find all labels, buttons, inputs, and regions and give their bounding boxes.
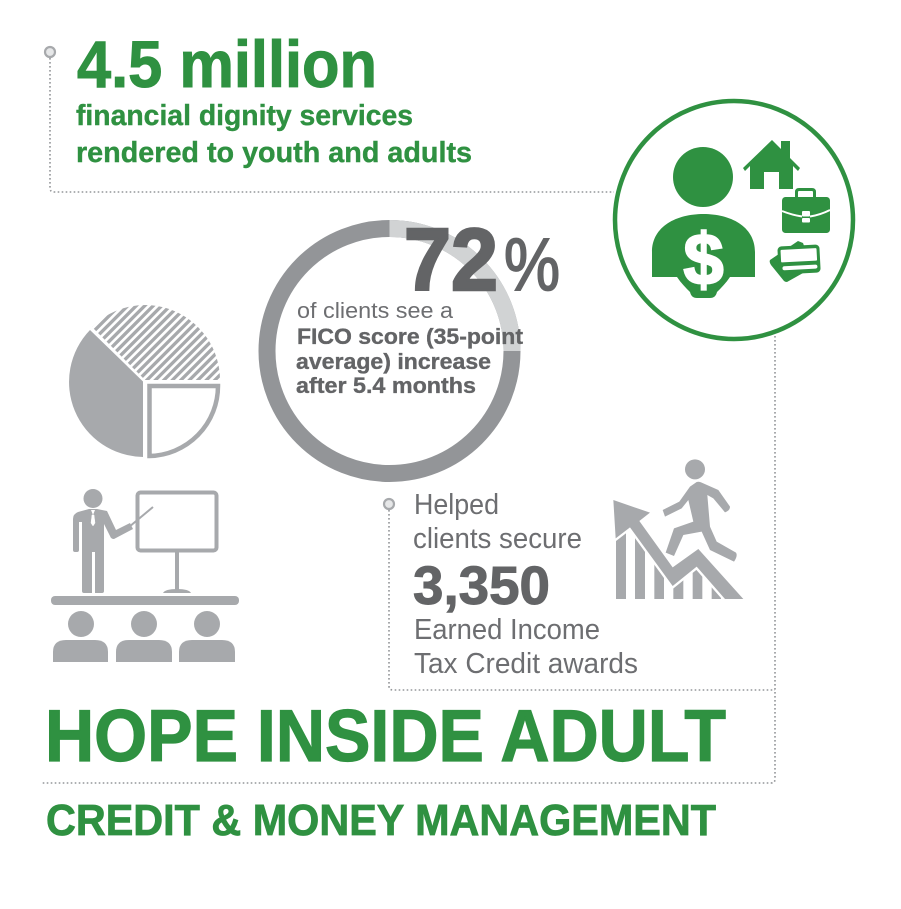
text block: Earned Income Tax Credit: Helped <box>414 489 499 521</box>
text block: Earned Income Tax Credit: clients secure <box>413 523 582 555</box>
stat: 72%: % <box>504 223 560 306</box>
icon: audience <box>53 611 235 662</box>
icon: house <box>743 140 800 189</box>
subheading: financial dignity services: financial dignity services <box>76 100 413 132</box>
headline: 4.5 million: 4.5 million <box>77 27 377 101</box>
stage <box>51 596 239 605</box>
stat: 72% <box>404 210 560 309</box>
icon: presenter at whiteboard with audience <box>51 489 239 662</box>
connector: right dotted line <box>41 336 775 783</box>
icon: pie chart <box>69 305 220 458</box>
icon: person with dollar: $ <box>683 220 724 300</box>
text block: FICO score description: FICO score (35-point <box>297 324 524 349</box>
text block: FICO score description <box>296 298 524 398</box>
subtitle: Credit and Money Management: CREDIT & MONEY MANAGEMENT <box>46 796 716 845</box>
text block: Earned Income Tax Credit: Earned Income <box>414 614 600 646</box>
icon: person climbing rising arrow <box>613 459 747 603</box>
connector: top dotted line <box>45 47 614 192</box>
icon: whiteboard <box>138 492 216 593</box>
chart: 72 percent donut ring <box>267 228 512 474</box>
icon: credit cards <box>770 241 821 282</box>
subheading: financial dignity services: rendered to youth and adults <box>76 137 472 169</box>
bars <box>616 527 721 599</box>
stat: 3,350: 3,350 <box>413 556 550 616</box>
text block: FICO score description: average) increase <box>296 349 491 374</box>
icon: person with dollar <box>652 147 755 300</box>
text block: Earned Income Tax Credit: Tax Credit awards <box>414 648 638 680</box>
icon: financial services badge <box>615 101 853 339</box>
icon: briefcase <box>782 190 830 233</box>
runner <box>663 459 737 562</box>
connector: tax credit dotted line <box>384 499 775 690</box>
title: Hope Inside Adult: HOPE INSIDE ADULT <box>45 696 726 777</box>
text block: FICO score description: after 5.4 months <box>296 373 476 398</box>
stat: 72%: 72 <box>404 210 498 309</box>
text block: FICO score description: of clients see a <box>297 298 453 323</box>
arrow <box>613 500 743 599</box>
subheading: financial dignity services <box>76 100 472 169</box>
text block: Earned Income Tax Credit <box>413 489 638 680</box>
icon: presenter <box>73 489 153 593</box>
